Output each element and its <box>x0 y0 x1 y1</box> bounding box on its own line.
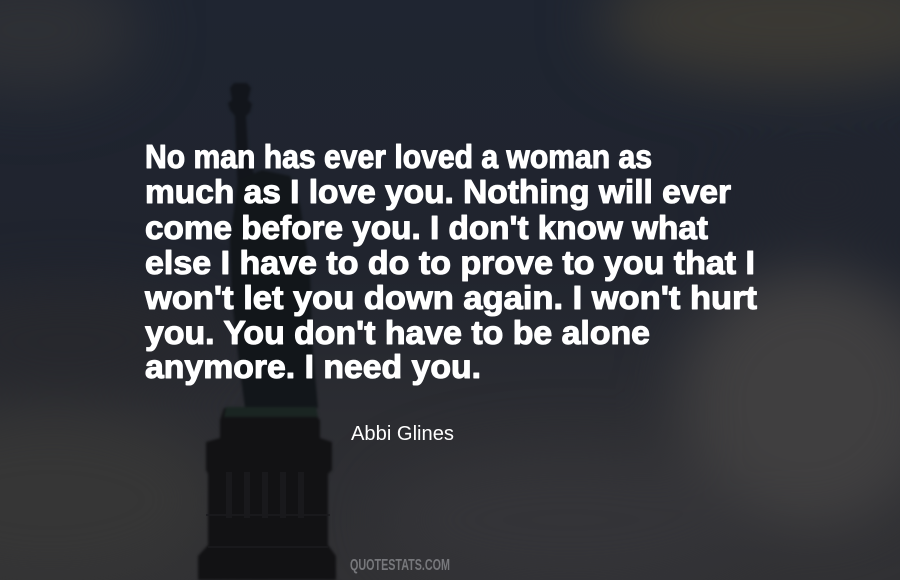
quote text: No man has ever loved a woman as <box>145 138 652 175</box>
quote text: anymore. I need you. <box>145 348 481 385</box>
quote text: you. You don't have to be alone <box>145 314 650 351</box>
quote text: come before you. I don't know what <box>145 209 708 246</box>
statue silhouette <box>198 83 336 580</box>
quote text: much as I love you. Nothing will ever <box>145 173 731 210</box>
pedestal columns <box>206 472 330 548</box>
quote text: else I have to do to prove to you that I <box>145 244 755 281</box>
author name: Abbi Glines <box>351 423 454 445</box>
torch and raised arm <box>228 83 262 205</box>
quote text: won't let you down again. I won't hurt <box>144 279 757 316</box>
watermark: QUOTESTATS.COM <box>350 557 450 574</box>
body and robe <box>230 170 318 408</box>
quote text <box>144 138 757 385</box>
pedestal <box>198 408 336 580</box>
